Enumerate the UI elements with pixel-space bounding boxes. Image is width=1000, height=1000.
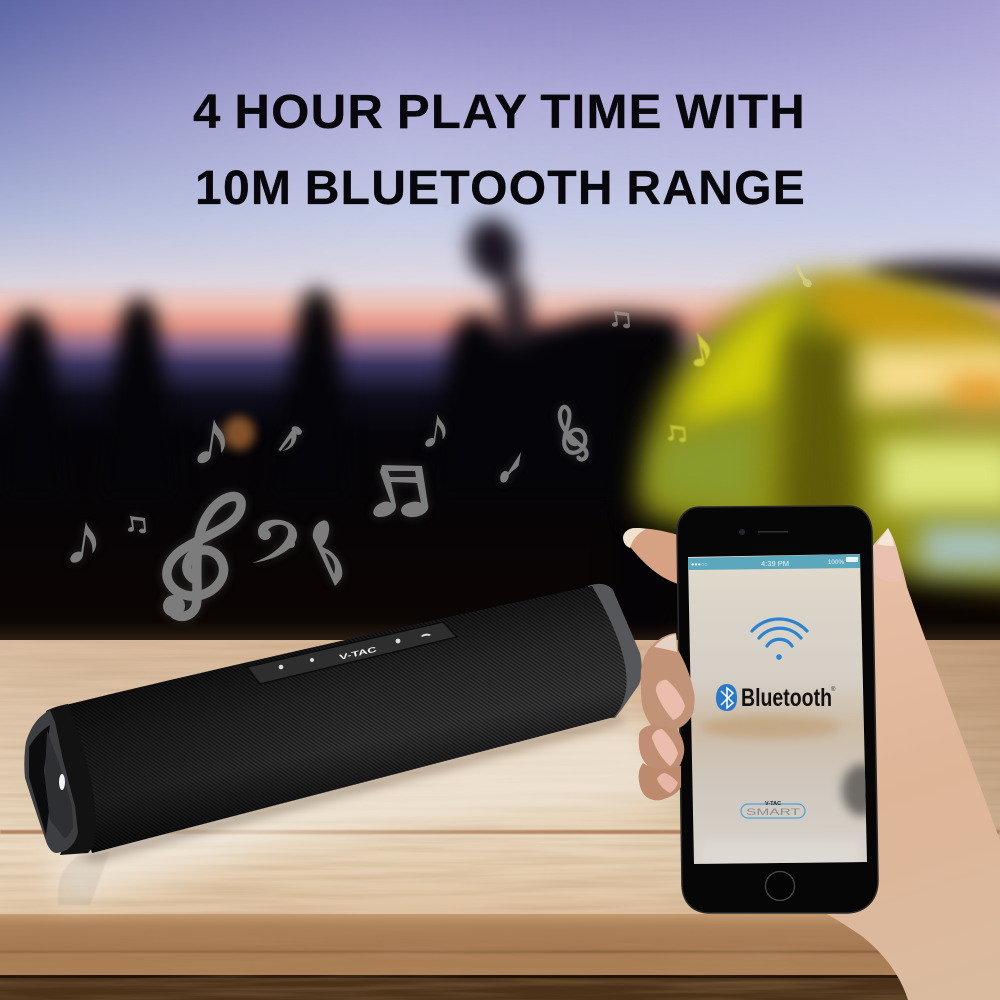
note: left eighth	[70, 521, 96, 563]
note: beamed pair	[373, 465, 428, 517]
speaker shadow	[75, 716, 626, 862]
smartphone	[677, 506, 882, 913]
earpiece	[758, 531, 788, 533]
finger two nail	[652, 729, 678, 766]
finger one nail	[656, 680, 685, 720]
hand behind phone	[623, 528, 1000, 1000]
note: slanted small	[278, 424, 303, 456]
finger two	[639, 725, 684, 772]
home button	[766, 872, 794, 900]
panel icons	[279, 634, 431, 669]
note: big treble clef	[167, 496, 241, 616]
note: inverted note	[313, 520, 342, 586]
finger three nail	[657, 773, 678, 793]
smart logo	[741, 801, 805, 818]
title	[193, 86, 806, 215]
note: bass clef	[252, 520, 297, 563]
title line one: 4 HOUR PLAY TIME WITH	[193, 86, 806, 139]
phone body	[677, 506, 878, 913]
blurred tree silhouettes	[0, 212, 1000, 630]
note: eighth	[197, 419, 225, 463]
smart logo text: SMART	[746, 807, 801, 817]
table shadow strip	[0, 975, 1000, 1000]
registered mark: ®	[831, 686, 836, 693]
plank seam	[0, 830, 1000, 834]
reflected speaker end	[58, 852, 110, 905]
speaker face opening	[29, 725, 50, 835]
note: tiny beamed	[128, 516, 146, 533]
note: yellow large	[694, 330, 710, 366]
blurred yellow tent	[640, 277, 1000, 590]
bluetooth wordmark: Bluetooth	[741, 684, 832, 712]
speaker face disc	[45, 730, 73, 838]
note: eighth right	[425, 414, 446, 447]
speaker reflection	[50, 715, 680, 905]
wooden table	[0, 640, 1000, 1000]
bluetooth icon	[716, 684, 737, 711]
speaker	[24, 584, 642, 862]
warm bokeh glow	[223, 416, 255, 450]
tent music notes	[612, 263, 812, 442]
music notes	[70, 406, 602, 617]
index finger	[625, 528, 678, 584]
note: pale top	[796, 263, 812, 287]
control panel	[247, 622, 457, 684]
screen blur bands	[700, 715, 882, 870]
speaker power indicator	[59, 774, 65, 790]
index nail	[623, 528, 646, 548]
speaker rubber band	[46, 704, 96, 855]
table top planks	[0, 640, 1000, 832]
note: big treble clef ball	[163, 595, 185, 617]
thumb nail tip	[877, 528, 894, 546]
speaker body	[66, 586, 627, 853]
speaker right end cap	[588, 584, 642, 718]
note: pale beamed	[612, 311, 630, 328]
phone screen	[688, 554, 867, 864]
brand text: V-TAC	[765, 801, 781, 807]
light front plank	[0, 832, 1000, 916]
note: small slanted eighth	[499, 452, 521, 484]
table front edge	[0, 914, 1000, 975]
finger three	[639, 763, 681, 800]
finger one	[641, 633, 695, 731]
camera	[739, 529, 745, 535]
palm and wrist	[825, 528, 1000, 1000]
status signal: ●●●○○	[691, 562, 708, 568]
status bar	[688, 554, 860, 570]
status time: 4:39 PM	[761, 559, 789, 568]
sky and dusk background	[0, 0, 1000, 640]
note: small treble clef	[543, 406, 602, 463]
status battery: 100%	[828, 559, 845, 566]
wifi icon	[752, 619, 807, 660]
finger one highlight	[654, 634, 677, 652]
thumb nail	[869, 528, 902, 582]
fingers in front of phone	[639, 633, 695, 800]
speaker face rim	[24, 710, 78, 853]
title line two: 10M BLUETOOTH RANGE	[195, 162, 806, 215]
note: yellow small	[668, 425, 686, 442]
panel logo: V-TAC	[338, 644, 378, 662]
